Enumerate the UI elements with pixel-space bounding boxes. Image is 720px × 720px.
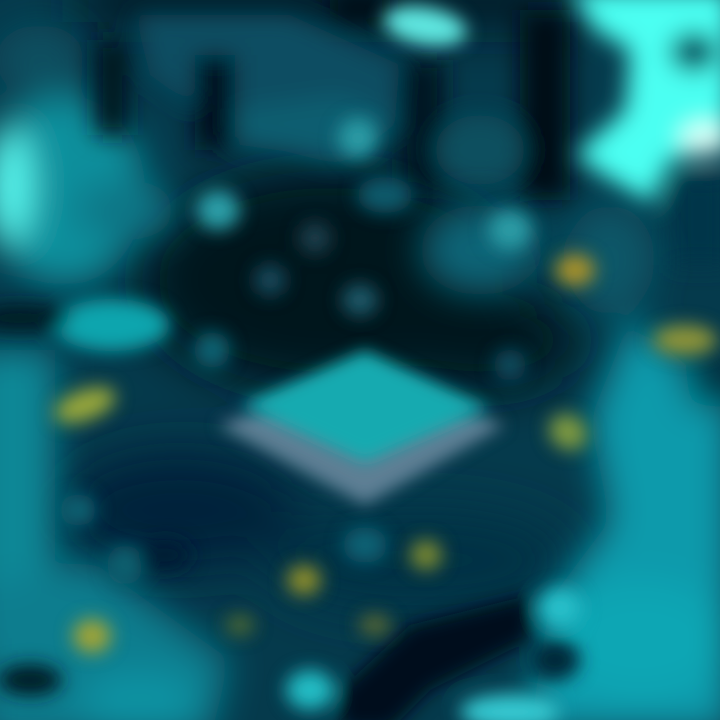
panel: left teal glow [0, 25, 230, 720]
dark background zones [60, 0, 580, 610]
panel: top right bright shape [570, 0, 720, 265]
chip base: grey edge [218, 375, 505, 505]
chip top: teal face [240, 350, 490, 462]
yellow accent dots [50, 254, 717, 653]
panel: lower right teal field [420, 205, 720, 720]
panel: top center block [95, 0, 570, 200]
central diamond chip [218, 350, 505, 505]
